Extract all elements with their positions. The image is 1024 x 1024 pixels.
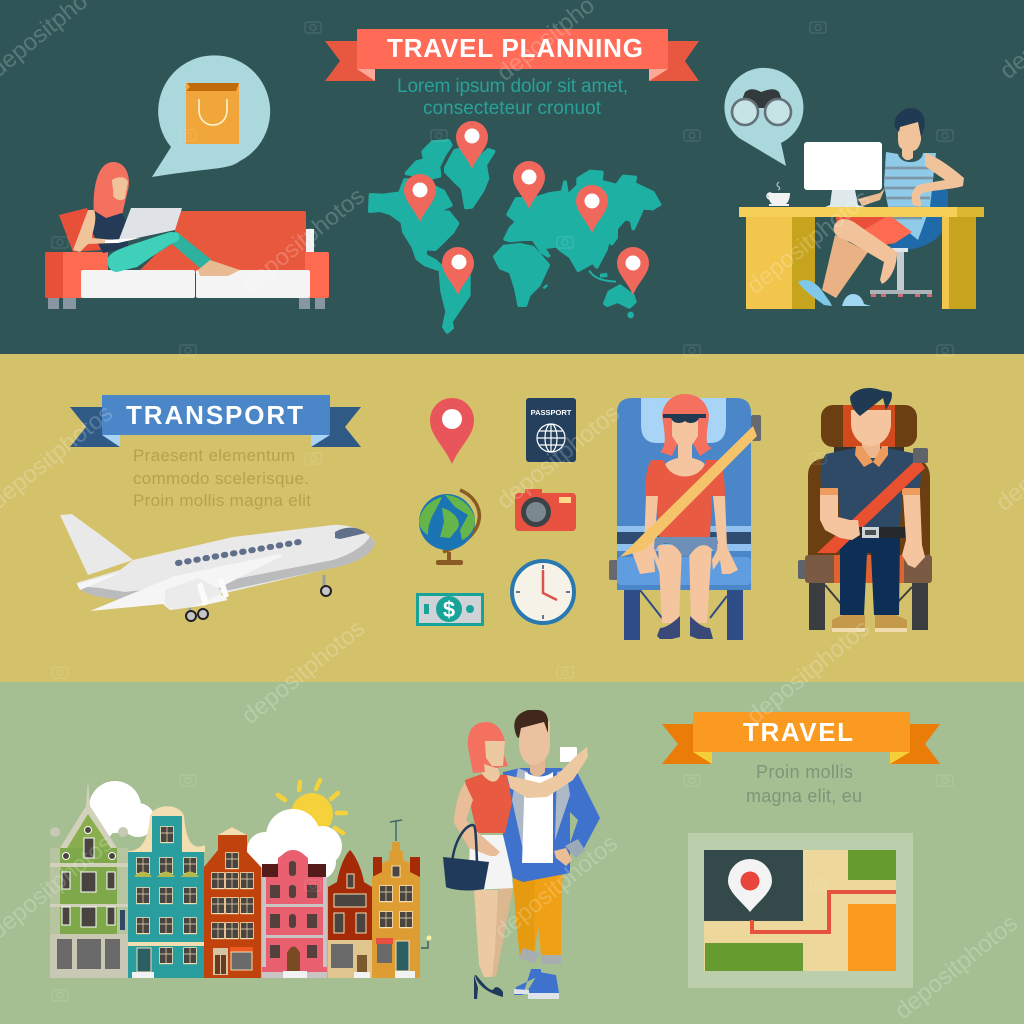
pin xyxy=(728,859,772,912)
speech bubble: binoculars xyxy=(724,68,803,166)
office chair xyxy=(870,187,948,297)
watermarks: depositphotos xyxy=(742,615,875,730)
heading ribbon: transport: TRANSPORT xyxy=(126,400,303,430)
watermarks: depositphotos xyxy=(490,830,623,945)
text: travel description xyxy=(746,762,862,806)
text: travel description: Proin mollis xyxy=(756,762,853,782)
hair xyxy=(94,162,129,222)
house: dark red xyxy=(328,850,372,978)
watermarks: depositphotos xyxy=(890,910,1023,1024)
panel: transport background xyxy=(0,354,1024,682)
trousers xyxy=(840,538,900,615)
watermarks: depositphotos xyxy=(237,615,370,730)
text: travel planning subtitle xyxy=(397,76,628,119)
hair xyxy=(850,388,892,416)
legs xyxy=(822,235,868,298)
arms xyxy=(820,495,860,540)
selfie arm and phone xyxy=(507,747,588,798)
woman on sofa xyxy=(45,162,329,309)
hair xyxy=(660,394,712,456)
icon: location pin xyxy=(430,398,474,464)
watermarks: depositphotos xyxy=(742,185,875,300)
shorts xyxy=(836,217,912,247)
desk xyxy=(739,207,984,309)
speech bubble: shopping bag xyxy=(152,55,270,177)
arms xyxy=(632,496,664,574)
tank top xyxy=(884,152,936,240)
man at desk xyxy=(739,108,984,309)
seat belt xyxy=(817,458,925,553)
neck xyxy=(862,438,880,458)
text: travel planning subtitle: Lorem ipsum dolor sit amet, xyxy=(397,76,628,97)
sofa xyxy=(45,211,329,309)
face xyxy=(851,410,891,446)
coffee cup xyxy=(767,182,790,206)
map card xyxy=(688,833,913,988)
laptop xyxy=(118,208,182,242)
icon: passport xyxy=(526,398,576,462)
torso xyxy=(92,210,128,253)
panel: travel planning background xyxy=(0,0,1024,354)
airplane xyxy=(60,514,375,621)
text: transport description: Proin mollis magna elit xyxy=(133,491,311,510)
shoes xyxy=(657,616,680,639)
belt xyxy=(850,527,911,538)
text: travel description: magna elit, eu xyxy=(746,786,862,806)
house: green gabled xyxy=(50,780,128,978)
woman lower body xyxy=(469,835,513,999)
heading ribbon: travel xyxy=(662,712,940,764)
seat xyxy=(609,398,761,640)
woman upper body xyxy=(454,722,512,856)
man in plane seat xyxy=(798,388,932,632)
house: pink xyxy=(262,850,327,978)
pillow xyxy=(59,208,101,252)
heading ribbon: travel planning xyxy=(325,29,699,81)
clouds xyxy=(85,781,342,880)
shoes xyxy=(832,615,907,632)
seat belt xyxy=(620,426,757,557)
text: transport description: Praesent elementum xyxy=(133,446,295,465)
sun xyxy=(278,780,346,835)
sleep mask xyxy=(663,414,706,423)
man xyxy=(503,710,600,999)
house: ochre stepped gable xyxy=(372,820,432,978)
text: transport description: commodo scelerisque. xyxy=(133,469,309,488)
legs xyxy=(140,232,214,268)
icon: passport: PASSPORT xyxy=(531,408,572,417)
icon: globe xyxy=(419,490,479,565)
collar xyxy=(855,446,888,467)
text: transport description xyxy=(133,446,311,510)
heading ribbon: travel planning: TRAVEL PLANNING xyxy=(387,33,643,63)
legs xyxy=(658,545,712,623)
icon: banknote xyxy=(418,594,482,624)
route xyxy=(752,892,896,932)
icon: banknote: $ xyxy=(443,597,455,622)
icon: clock xyxy=(512,561,574,623)
couple taking a selfie xyxy=(443,710,600,999)
arm xyxy=(912,153,964,207)
house: teal xyxy=(128,806,205,978)
text: travel planning subtitle: consecteteur cronuot xyxy=(423,98,602,119)
shirt xyxy=(821,448,921,527)
shorts xyxy=(652,537,717,556)
seat xyxy=(798,405,932,630)
watermarks: depositphotos xyxy=(237,183,370,298)
head xyxy=(898,118,921,160)
row of houses xyxy=(50,780,432,978)
monitor xyxy=(804,142,882,190)
shirt xyxy=(645,460,725,537)
heading ribbon: travel: TRAVEL xyxy=(743,717,853,747)
face and neck xyxy=(664,420,706,485)
handbag xyxy=(443,825,489,890)
map pins xyxy=(404,121,649,295)
slippers xyxy=(798,280,832,306)
panel: travel background xyxy=(0,682,1024,1024)
heading ribbon: transport xyxy=(70,395,361,447)
house: terracotta xyxy=(204,827,261,978)
woman in plane seat xyxy=(609,394,761,640)
icon: camera xyxy=(515,489,576,531)
watermarks: depositphotos xyxy=(492,400,625,515)
world map xyxy=(370,141,659,332)
